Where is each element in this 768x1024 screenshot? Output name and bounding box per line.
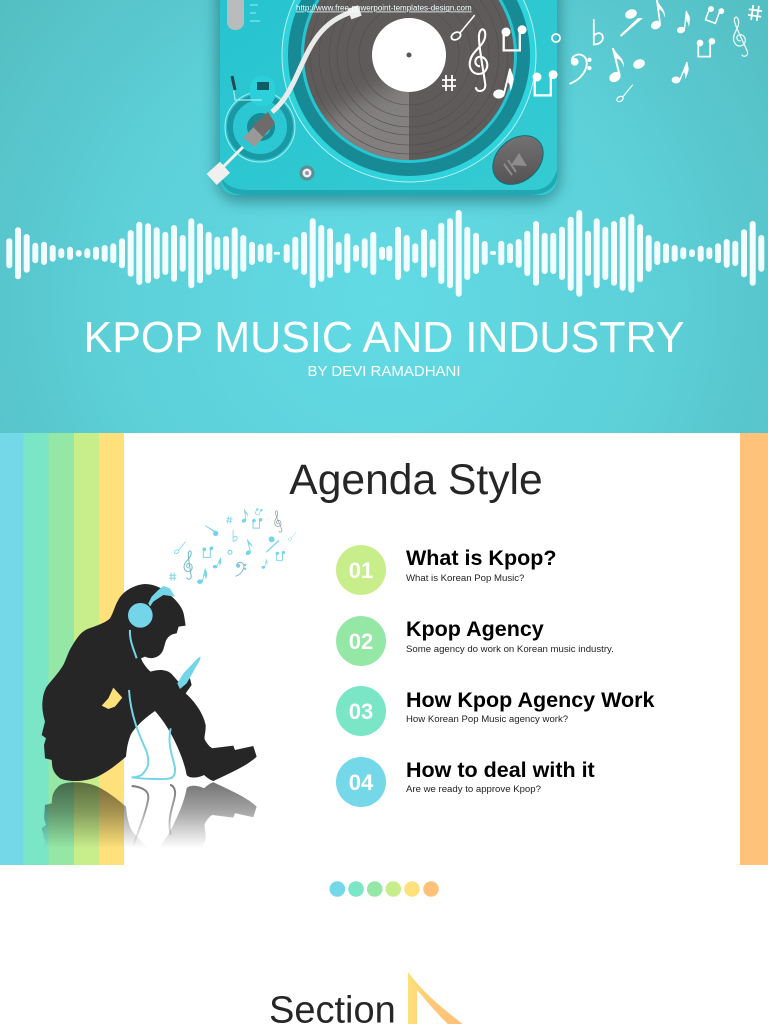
illustration: listening silhouette bbox=[42, 584, 257, 979]
panel: title slide background bbox=[0, 0, 768, 433]
agenda item 02 bbox=[336, 616, 614, 666]
title: KPOP MUSIC AND INDUSTRY bbox=[84, 314, 684, 362]
icon: small music notes bbox=[169, 507, 296, 586]
panel: agenda slide bbox=[0, 433, 768, 979]
agenda item 03: How Kpop Agency Work bbox=[406, 688, 654, 712]
agenda item 03: 03 bbox=[349, 699, 373, 724]
arm gap bbox=[102, 688, 122, 709]
icon: music notes around the record bbox=[442, 0, 763, 103]
icon: speed slider bbox=[227, 0, 260, 30]
cables bbox=[129, 630, 175, 779]
agenda item 03: How Korean Pop Music agency work? bbox=[406, 714, 568, 725]
agenda item 02: Some agency do work on Korean music industry. bbox=[406, 644, 614, 655]
icon: turntable bbox=[207, 0, 560, 202]
colour dots bbox=[330, 881, 439, 897]
icon: section triangle bbox=[408, 972, 465, 1024]
agenda item 01: 01 bbox=[349, 558, 373, 583]
agenda item 01 bbox=[336, 545, 556, 595]
agenda item 01: What is Kpop? bbox=[406, 546, 556, 570]
agenda item 04: How to deal with it bbox=[406, 758, 595, 782]
agenda item 03 bbox=[336, 686, 654, 736]
waveform bbox=[9, 213, 761, 294]
agenda item 04: 04 bbox=[349, 770, 374, 795]
subtitle: BY DEVI RAMADHANI bbox=[307, 363, 461, 380]
agenda item 04: Are we ready to approve Kpop? bbox=[406, 784, 541, 795]
icon: tablet bbox=[177, 657, 201, 689]
agenda item 01: What is Korean Pop Music? bbox=[406, 573, 524, 584]
heading: agenda: Agenda Style bbox=[289, 456, 543, 504]
icon: knob bbox=[300, 166, 314, 180]
rainbow stripes bbox=[0, 433, 124, 865]
right stripe bbox=[740, 433, 768, 865]
icon: tonearm bbox=[207, 5, 362, 185]
reflection bbox=[42, 782, 257, 979]
icon: tonearm pivot bbox=[225, 76, 295, 162]
source link: http://www.free-powerpoint-templates-design.com bbox=[296, 4, 472, 12]
agenda item 02: 02 bbox=[349, 629, 373, 654]
agenda item 04 bbox=[336, 757, 595, 807]
agenda item 02: Kpop Agency bbox=[406, 617, 544, 641]
icon: headphones bbox=[128, 586, 175, 628]
icon: play button bbox=[483, 126, 553, 194]
